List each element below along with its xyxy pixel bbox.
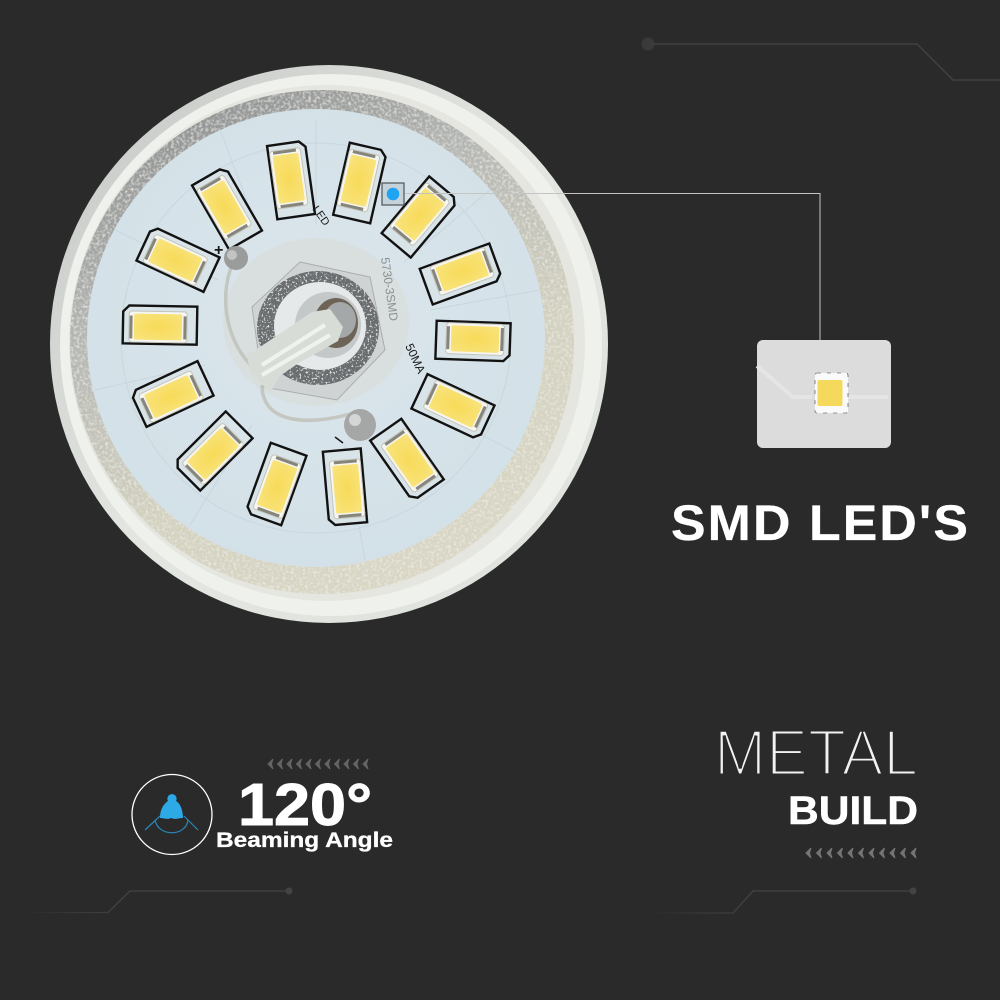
central wire tube [247, 309, 343, 393]
board markings: LED [310, 204, 332, 228]
board markings [214, 204, 428, 443]
callout marker: blue dot in square [382, 183, 404, 205]
LED 12 [130, 361, 214, 427]
LED 6 [435, 321, 511, 361]
board markings: 50MA [402, 341, 428, 376]
inner channel [70, 90, 574, 594]
hex nut [252, 262, 385, 400]
LED 4 [382, 176, 458, 258]
LED 1 [192, 166, 262, 250]
LED 11 [173, 411, 253, 491]
translucent glue disc [223, 238, 409, 406]
chevron row: left [268, 759, 368, 769]
heading: SMD LED'S: SMD LED'S [671, 495, 970, 551]
solder wires [226, 265, 350, 420]
heading: METAL: METAL [714, 716, 918, 789]
LED ring [123, 141, 511, 526]
LED 7 [411, 374, 495, 440]
stat label: Beaming Angle: Beaming Angle [216, 828, 393, 852]
icon: beam angle lamp [132, 774, 212, 854]
board markings: + [214, 242, 223, 259]
heading: BUILD: BUILD [788, 789, 918, 833]
LED 14 [136, 226, 220, 292]
stat: 120 degrees: 120° [238, 772, 372, 838]
decorative circuit line: top right [642, 38, 1000, 80]
chevron row: right [806, 848, 916, 858]
LED 3 [333, 143, 387, 223]
detail tile: single SMD LED [757, 340, 891, 448]
board markings: 5730-3SMD [378, 256, 401, 322]
decorative circuit line: bottom left [20, 888, 292, 912]
lamp photo: LED board inside bulb housing [50, 65, 608, 623]
solder points [224, 246, 376, 441]
LED 9 [323, 448, 367, 526]
circuit board disc [87, 109, 545, 567]
LED 2 [267, 141, 315, 219]
housing outer rim [50, 65, 608, 623]
LED 13 [123, 305, 197, 345]
LED 8 [370, 419, 444, 501]
decorative circuit line: bottom right [645, 888, 916, 913]
callout leader from LED to detail tile [404, 194, 820, 340]
LED 5 [420, 243, 502, 305]
LED 10 [245, 443, 307, 525]
